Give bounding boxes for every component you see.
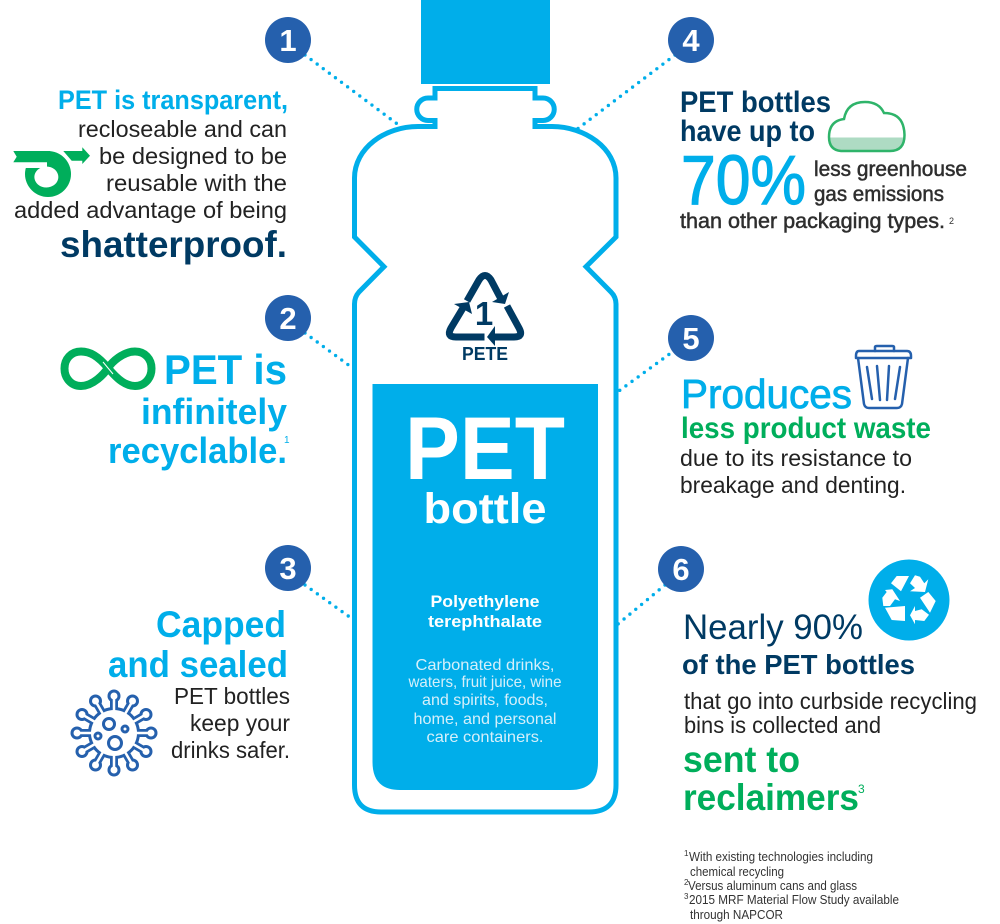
body text: reusable with the [106, 170, 287, 196]
badge 3 [265, 545, 311, 591]
panel 6: recycling [682, 560, 977, 818]
body text: infinitely [141, 391, 287, 432]
label chemical name: Polyethylene [430, 593, 540, 611]
icon: recycling code 1 PETE: PETE [462, 344, 508, 364]
body text: breakage and denting. [680, 472, 906, 498]
label uses: care containers. [426, 729, 544, 746]
label uses: home, and personal [414, 711, 556, 728]
bottle label panel [372, 384, 598, 790]
label subtitle: bottle [424, 485, 546, 533]
emphasis: sent to [683, 739, 800, 780]
footnotes: 1 [684, 849, 689, 858]
panel 2: infinitely recyclable: recyclable. [108, 430, 287, 471]
subheading: less product waste [681, 412, 931, 445]
badge 5 [668, 315, 714, 361]
bottle [354, 0, 616, 812]
footnote mark: 1 [284, 435, 290, 446]
statistic: 70% [681, 141, 806, 219]
label uses [408, 657, 562, 746]
body text [171, 683, 290, 763]
heading: Nearly 90% [683, 608, 863, 647]
footnote mark: 2 [949, 216, 954, 226]
icon: infinity [64, 352, 152, 386]
footnotes: 3 [684, 892, 689, 901]
footnotes [684, 849, 899, 922]
panel 6: recycling: reclaimers [683, 777, 859, 818]
body text: due to its resistance to [680, 445, 912, 471]
panel 2: infinitely recyclable [64, 346, 290, 471]
body text: keep your [190, 710, 290, 736]
panel 3: capped and sealed [70, 604, 290, 776]
body text: drinks safer. [171, 737, 290, 763]
panel 5: less waste [680, 346, 931, 498]
icon: recycling code 1 PETE: 1 [475, 295, 493, 332]
icon: trash can [856, 346, 911, 408]
body text: bins is collected and [684, 712, 881, 738]
footnotes: 2 [684, 878, 689, 887]
icon: recycling code 1 PETE [449, 276, 521, 364]
body text: gas emissions [814, 183, 944, 206]
body text: PET bottles [174, 683, 290, 709]
badge 6 [658, 546, 704, 592]
bottle cap [421, 0, 550, 84]
badge 4: 4 [682, 23, 700, 58]
body text [14, 116, 287, 223]
body text: be designed to be [99, 143, 287, 169]
heading: PET bottles [680, 86, 831, 119]
body text [680, 158, 967, 233]
panel 4: greenhouse gas: have up to [680, 115, 815, 148]
label uses: and spirits, foods, [422, 692, 548, 709]
footnote mark: 3 [858, 782, 865, 796]
heading: PET is transparent, [58, 85, 288, 115]
panel 4: greenhouse gas [680, 86, 967, 233]
heading: Capped [156, 604, 286, 645]
label uses: Carbonated drinks, [416, 657, 554, 674]
panel 3: capped and sealed: and sealed [108, 644, 288, 685]
body text: less greenhouse [814, 158, 967, 181]
icon: recycle circle [868, 560, 950, 640]
body text [680, 445, 912, 498]
heading: Produces [681, 371, 852, 417]
footnotes: With existing technologies including [689, 850, 873, 864]
heading: PET is [164, 346, 287, 393]
body text: added advantage of being [14, 197, 287, 223]
body text: than other packaging types. [680, 210, 945, 233]
footnotes: Versus aluminum cans and glass [688, 879, 857, 893]
badge 1: 1 [279, 23, 297, 58]
body text: that go into curbside recycling [684, 688, 977, 714]
badge 2: 2 [279, 301, 297, 336]
footnotes: through NAPCOR [690, 908, 783, 922]
label chemical name [428, 593, 542, 631]
badge 2 [265, 295, 311, 341]
subheading: of the PET bottles [682, 649, 915, 680]
footnotes: 2015 MRF Material Flow Study available [689, 893, 899, 907]
label title: PET [405, 398, 565, 498]
label chemical name: terephthalate [428, 613, 542, 631]
emphasis: shatterproof. [60, 224, 287, 265]
footnotes: chemical recycling [690, 865, 784, 879]
badge 1 [265, 17, 311, 63]
badge 5: 5 [682, 321, 700, 356]
badge 6: 6 [672, 552, 690, 587]
body text [684, 688, 977, 738]
panel 1: transparent [13, 85, 288, 265]
icon: virus [70, 690, 158, 776]
connector: dotted lines [305, 55, 675, 629]
icon: cloud [829, 102, 904, 151]
label uses: waters, fruit juice, wine [408, 674, 562, 691]
body text: recloseable and can [78, 116, 287, 142]
icon: reuse arrow [13, 147, 90, 197]
badge 4 [668, 17, 714, 63]
bottle outline [354, 88, 616, 812]
badge 3: 3 [279, 551, 297, 586]
